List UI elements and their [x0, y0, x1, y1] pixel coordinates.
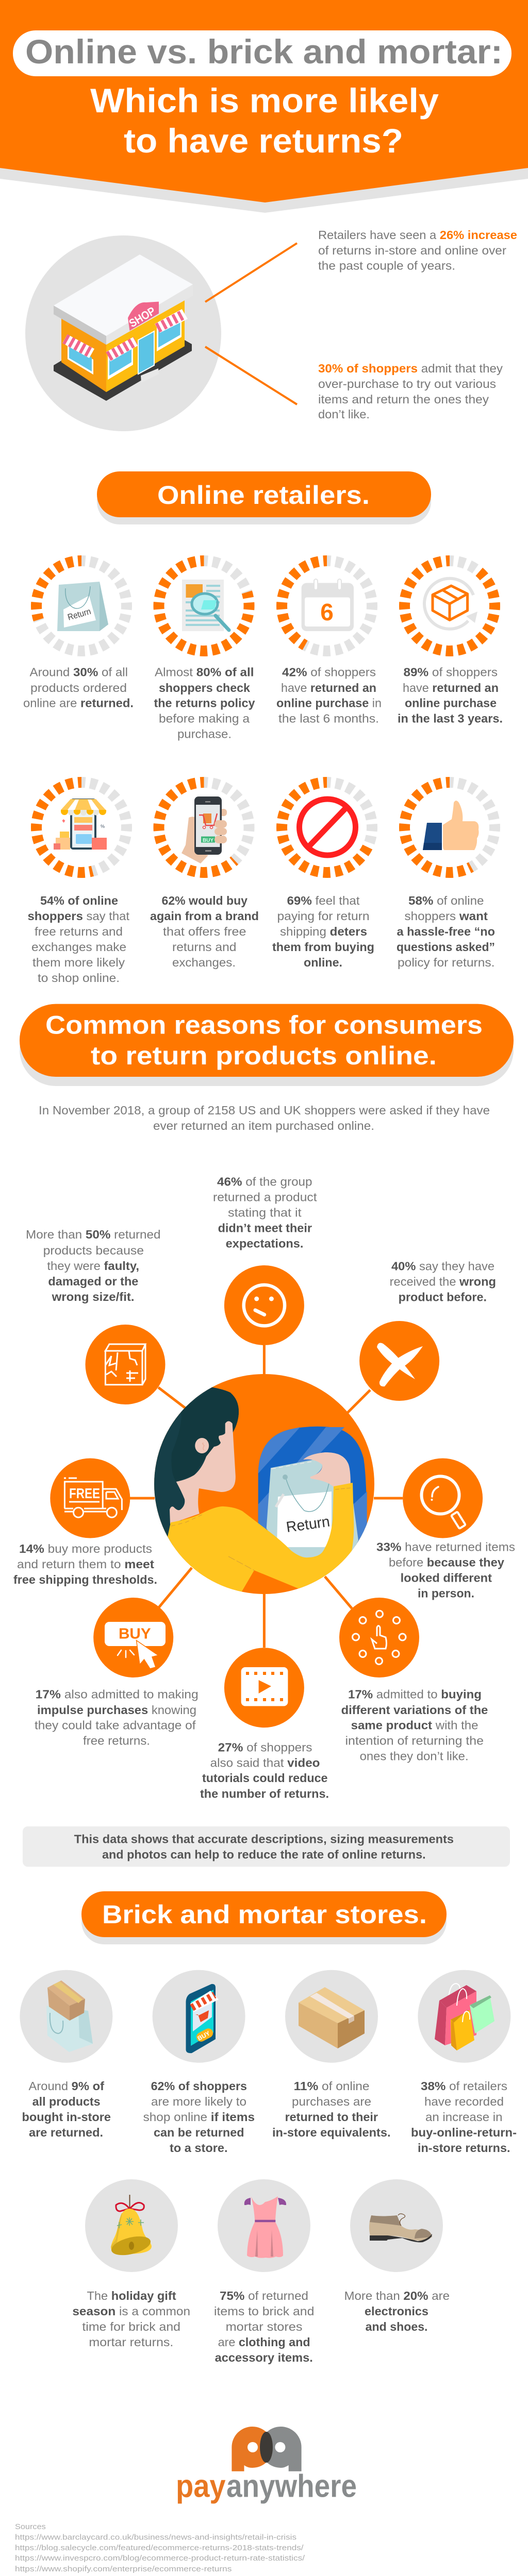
text	[213, 1175, 317, 1250]
icon: free truck: FREE	[69, 1485, 100, 1501]
text: 17% admitted to buying	[348, 1688, 482, 1701]
text: Around 30% of all	[30, 666, 128, 679]
text: shoppers check	[159, 681, 250, 694]
text: same product with the	[351, 1719, 478, 1732]
shop sign: SHOP	[127, 304, 158, 330]
hand	[303, 1452, 351, 1489]
text: 54% of online	[40, 894, 118, 907]
center illustration: woman returning a bag	[144, 1374, 374, 1602]
text: shipping deters	[280, 925, 367, 938]
callout: data summary	[23, 1826, 510, 1867]
text: purchase.	[177, 727, 232, 741]
reason: 14% free shipping	[13, 1458, 157, 1586]
text: impulse purchases knowing	[37, 1703, 196, 1717]
text: can be returned	[154, 2126, 244, 2139]
panel: 20% electronics and shoes	[344, 2179, 450, 2333]
icon: magnifier over document	[182, 580, 229, 631]
icon: shoe	[350, 2179, 443, 2272]
panel: 38% of retailers	[411, 1970, 517, 2155]
sources list: Sources	[15, 2522, 46, 2531]
icon: return bag: Return	[67, 606, 92, 622]
icon: buy button with cursor	[93, 1598, 173, 1677]
reason: 17% buying variations	[339, 1598, 488, 1763]
text: More than 50% returned	[26, 1228, 161, 1241]
reason: 27% video tutorials	[200, 1648, 329, 1800]
text: 38% of retailers	[421, 2079, 507, 2093]
sources list	[15, 2522, 514, 2576]
text: exchanges.	[172, 956, 236, 969]
stat: 30% of shoppers: don’t like.	[318, 408, 370, 421]
text: products ordered	[30, 681, 127, 694]
connector spokes	[130, 1345, 403, 1648]
icon: hand with options	[339, 1598, 419, 1677]
text	[150, 894, 259, 969]
text: them from buying	[272, 940, 374, 954]
reason: 50% faulty	[26, 1228, 165, 1404]
bag label text: Return	[285, 1514, 331, 1536]
text	[272, 894, 374, 969]
text: all products	[32, 2095, 101, 2108]
text: 46% of the group	[217, 1175, 312, 1189]
text: online purchase	[405, 697, 497, 710]
stat: 26% increase: of returns in-store and online over	[318, 244, 506, 257]
stat: 30% of shoppers: items and return the ones they	[318, 393, 489, 406]
icon: calendar	[302, 579, 354, 631]
reason: 33% looked different	[376, 1458, 515, 1600]
icon: phone shop	[54, 799, 107, 850]
text: also said that video	[210, 1756, 320, 1769]
text	[23, 666, 134, 710]
text	[26, 1228, 161, 1303]
heading: Brick and mortar stores: Brick and mortar stores.	[102, 1900, 427, 1929]
text	[376, 1540, 515, 1600]
intro text: In November 2018, a group of 2158 US and UK shoppers were asked if they have	[39, 1104, 490, 1117]
icon: damaged box	[86, 1325, 165, 1404]
text: 62% would buy	[162, 894, 248, 907]
text: the returns policy	[154, 697, 255, 710]
text: in the last 3 years.	[398, 712, 503, 725]
text: to a store.	[170, 2141, 228, 2155]
text: free returns.	[83, 1734, 150, 1748]
stat: 26% increase: the past couple of years.	[318, 259, 455, 272]
callout: data summary: This data shows that accurate descriptions, sizing measurements	[74, 1832, 454, 1845]
text: accessory items.	[215, 2351, 313, 2364]
text: bought in-store	[22, 2110, 111, 2124]
title: which is more likely	[90, 81, 439, 160]
text	[72, 2289, 190, 2349]
icon: box with return arrows	[424, 579, 477, 629]
panel: 69% return shipping deters	[272, 782, 374, 969]
blue panel with stripes	[258, 1427, 367, 1546]
text: in-store equivalents.	[272, 2126, 391, 2139]
ring 69%	[282, 782, 372, 873]
title pill: Online vs. brick and mortar: Online vs. brick and mortar:	[25, 32, 503, 71]
text: 17% also admitted to making	[36, 1688, 199, 1701]
text: electronics	[365, 2304, 428, 2318]
icon: return bag	[57, 582, 108, 631]
ring 58%	[404, 782, 495, 873]
header banner	[0, 0, 528, 213]
text: damaged or the	[48, 1275, 138, 1288]
logo wordmark: pay	[176, 2469, 226, 2504]
heading: Common reasons	[20, 1004, 514, 1086]
icon: thumbs up	[423, 801, 479, 850]
text: items to brick and	[214, 2304, 314, 2318]
icon: prohibition sign	[299, 799, 356, 855]
text: looked different	[401, 1571, 492, 1585]
text	[13, 1542, 157, 1586]
title: which is more likely: to have returns?	[124, 122, 403, 160]
text: exchanges make	[31, 940, 126, 954]
logo mark	[232, 2427, 302, 2471]
text: didn’t meet their	[218, 1222, 312, 1235]
text	[390, 1260, 496, 1304]
text: 33% have returned items	[376, 1540, 515, 1554]
text: expectations.	[226, 1237, 303, 1250]
stat: 30% of shoppers: over-purchase to try out various	[318, 377, 496, 391]
text: 69% feel that	[287, 894, 360, 907]
panel: 42% returned in 6 months	[276, 561, 382, 725]
ring 80%	[159, 561, 249, 651]
icon: magnifying glass	[403, 1458, 483, 1538]
panel: 75% clothing	[214, 2179, 314, 2364]
text: policy for returns.	[398, 956, 495, 969]
text: are returned.	[29, 2126, 103, 2139]
panel: 11% online purchases	[272, 1970, 391, 2139]
icon: bag with box	[20, 1970, 112, 2063]
text	[276, 666, 382, 725]
text: have returned an	[403, 681, 499, 694]
ring 89%	[404, 561, 495, 651]
sources list: https://www.barclaycard.co.uk/business/news-and-insights/retail-in-crisis	[15, 2533, 296, 2541]
icon: phone store: BUY	[196, 2029, 211, 2042]
text: the number of returns.	[200, 1787, 329, 1800]
icon: buy button with cursor: BUY	[119, 1626, 151, 1642]
text	[397, 894, 495, 969]
sources list: https://www.shopify.com/enterprise/ecommerce-returns	[15, 2565, 232, 2573]
text	[154, 666, 255, 741]
text: are more likely to	[151, 2095, 246, 2108]
text	[200, 1740, 329, 1800]
text: shoppers say that	[28, 909, 130, 923]
text: they were faulty,	[47, 1259, 139, 1273]
text: The holiday gift	[87, 2289, 176, 2302]
text: before because they	[389, 1556, 504, 1569]
panel: 30% returned	[23, 561, 134, 710]
ring 42%	[282, 561, 372, 651]
text: stating that it	[228, 1206, 302, 1219]
text: 42% of shoppers	[282, 666, 376, 679]
ring 62%	[159, 782, 249, 873]
text: questions asked”	[397, 940, 495, 954]
text: 62% of shoppers	[151, 2079, 247, 2093]
text: 75% of returned	[220, 2289, 308, 2302]
text: them more likely	[32, 956, 125, 969]
text: paying for return	[277, 909, 369, 923]
text: returns and	[172, 940, 236, 954]
text: 14% buy more products	[19, 1542, 152, 1555]
text: in person.	[418, 1587, 474, 1600]
text: online are returned.	[23, 697, 134, 710]
text: mortar returns.	[89, 2335, 173, 2349]
panel: 80% check policy	[154, 561, 255, 741]
panel: holiday gift season	[72, 2179, 190, 2349]
text: returned to their	[285, 2110, 378, 2124]
text: More than 20% are	[344, 2289, 450, 2302]
text: buy-online-return-	[411, 2126, 517, 2139]
text: shop online if items	[143, 2110, 255, 2124]
reason: 17% impulse purchases	[35, 1598, 199, 1748]
text: online.	[304, 956, 342, 969]
icon: calendar: 6	[320, 599, 334, 625]
stat: 26% increase: Retailers have seen a 26% increase	[318, 228, 517, 242]
text: before making a	[159, 712, 250, 725]
icon: cardboard box	[285, 1970, 378, 2063]
icon: X mark	[359, 1321, 439, 1401]
text: have recorded	[424, 2095, 504, 2108]
icon: hand holding phone: BUY	[203, 838, 213, 843]
stat: 30% of shoppers: 30% of shoppers admit that they	[318, 362, 503, 375]
icon: video frame	[224, 1648, 304, 1727]
text: free shipping thresholds.	[13, 1573, 157, 1586]
heading: Common reasons: Common reasons for consumers	[45, 1011, 483, 1040]
panel: 9% returned	[20, 1970, 112, 2139]
text: time for brick and	[82, 2320, 180, 2333]
text: 58% of online	[408, 894, 484, 907]
text: wrong size/fit.	[52, 1290, 135, 1303]
icon: unhappy face	[224, 1265, 304, 1345]
reason: 40% wrong product	[359, 1260, 496, 1401]
text: in-store returns.	[418, 2141, 510, 2155]
text: an increase in	[425, 2110, 502, 2124]
heading: Brick and mortar stores	[81, 1891, 447, 1944]
panel: 58% no questions asked	[397, 782, 495, 969]
text: Almost 80% of all	[155, 666, 254, 679]
sources list: https://blog.salecycle.com/featured/ecommerce-returns-2018-stats-trends/	[15, 2544, 304, 2552]
text	[22, 2079, 111, 2139]
text: shoppers want	[404, 909, 488, 923]
icon: shopping bags	[418, 1970, 510, 2063]
logo: payanywhere	[176, 2427, 357, 2504]
text: mortar stores	[226, 2320, 302, 2333]
callout: data summary: and photos can help to reduce the rate of online returns.	[102, 1848, 426, 1861]
text	[411, 2079, 517, 2155]
text: and return them to meet	[17, 1557, 154, 1571]
text: purchases are	[292, 2095, 371, 2108]
ring 30%	[36, 561, 127, 651]
intro text	[39, 1104, 490, 1132]
title: which is more likely: Which is more likely	[90, 81, 439, 120]
heading: Online retailers: Online retailers.	[157, 481, 370, 510]
text	[341, 1688, 488, 1763]
face and neck	[170, 1421, 236, 1524]
panel: 89% returned in 3 years	[398, 561, 503, 725]
heading: Online retailers	[97, 471, 431, 524]
text	[344, 2289, 450, 2333]
icon: dress	[218, 2179, 310, 2272]
text	[398, 666, 503, 725]
icon: bell	[85, 2179, 178, 2272]
logo wordmark: anywhere	[226, 2469, 357, 2504]
text: the last 6 months.	[278, 712, 379, 725]
shopping bag	[267, 1460, 358, 1561]
intro text: ever returned an item purchased online.	[153, 1119, 374, 1132]
text: 40% say they have	[391, 1260, 494, 1273]
panel: 54% free returns	[28, 782, 130, 985]
text: received the wrong	[390, 1275, 496, 1289]
text: intention of returning the	[345, 1734, 484, 1748]
icon: hand holding phone	[182, 796, 227, 863]
sources list: https://www.invespcro.com/blog/ecommerce-product-return-rate-statistics/	[15, 2554, 305, 2563]
text: 27% of shoppers	[218, 1740, 312, 1754]
text: season is a common	[72, 2304, 190, 2318]
text: a hassle-free “no	[397, 925, 495, 938]
text	[28, 894, 130, 985]
icon: free truck	[50, 1458, 130, 1538]
text: 89% of shoppers	[403, 666, 498, 679]
text: different variations of the	[341, 1703, 488, 1717]
yellow sweater	[168, 1483, 354, 1592]
text: product before.	[399, 1291, 487, 1304]
text: products because	[43, 1244, 144, 1257]
text: free returns and	[35, 925, 123, 938]
text: to shop online.	[38, 971, 120, 985]
text: and shoes.	[366, 2320, 428, 2333]
illustration: isometric shop	[25, 235, 221, 431]
hair	[150, 1387, 239, 1546]
text: 11% of online	[294, 2079, 369, 2093]
text: they could take advantage of	[35, 1719, 196, 1732]
text: have returned an	[281, 681, 376, 694]
connector lines from shop	[205, 243, 297, 404]
text: tutorials could reduce	[202, 1771, 328, 1785]
text: ones they don’t like.	[360, 1750, 469, 1763]
text: that offers free	[163, 925, 246, 938]
ring 54%	[36, 782, 127, 873]
text: online purchase in	[276, 697, 382, 710]
text	[272, 2079, 391, 2139]
panel: 62% shop online	[143, 1970, 255, 2155]
reason: 46% didn't meet expectations	[213, 1175, 317, 1345]
icon: phone shop: %	[101, 824, 105, 829]
text	[35, 1688, 199, 1748]
text: are clothing and	[218, 2335, 310, 2349]
logo wordmark	[176, 2469, 357, 2504]
icon: phone store	[153, 1970, 245, 2063]
text	[214, 2289, 314, 2364]
text: Around 9% of	[29, 2079, 104, 2093]
text	[143, 2079, 255, 2155]
text: returned a product	[213, 1191, 317, 1204]
stat: 30% of shoppers	[318, 362, 503, 421]
panel: 62% would buy again	[150, 782, 259, 969]
stat: 26% increase	[318, 228, 517, 272]
heading: Common reasons: to return products online.	[91, 1041, 437, 1070]
text: again from a brand	[150, 909, 259, 923]
